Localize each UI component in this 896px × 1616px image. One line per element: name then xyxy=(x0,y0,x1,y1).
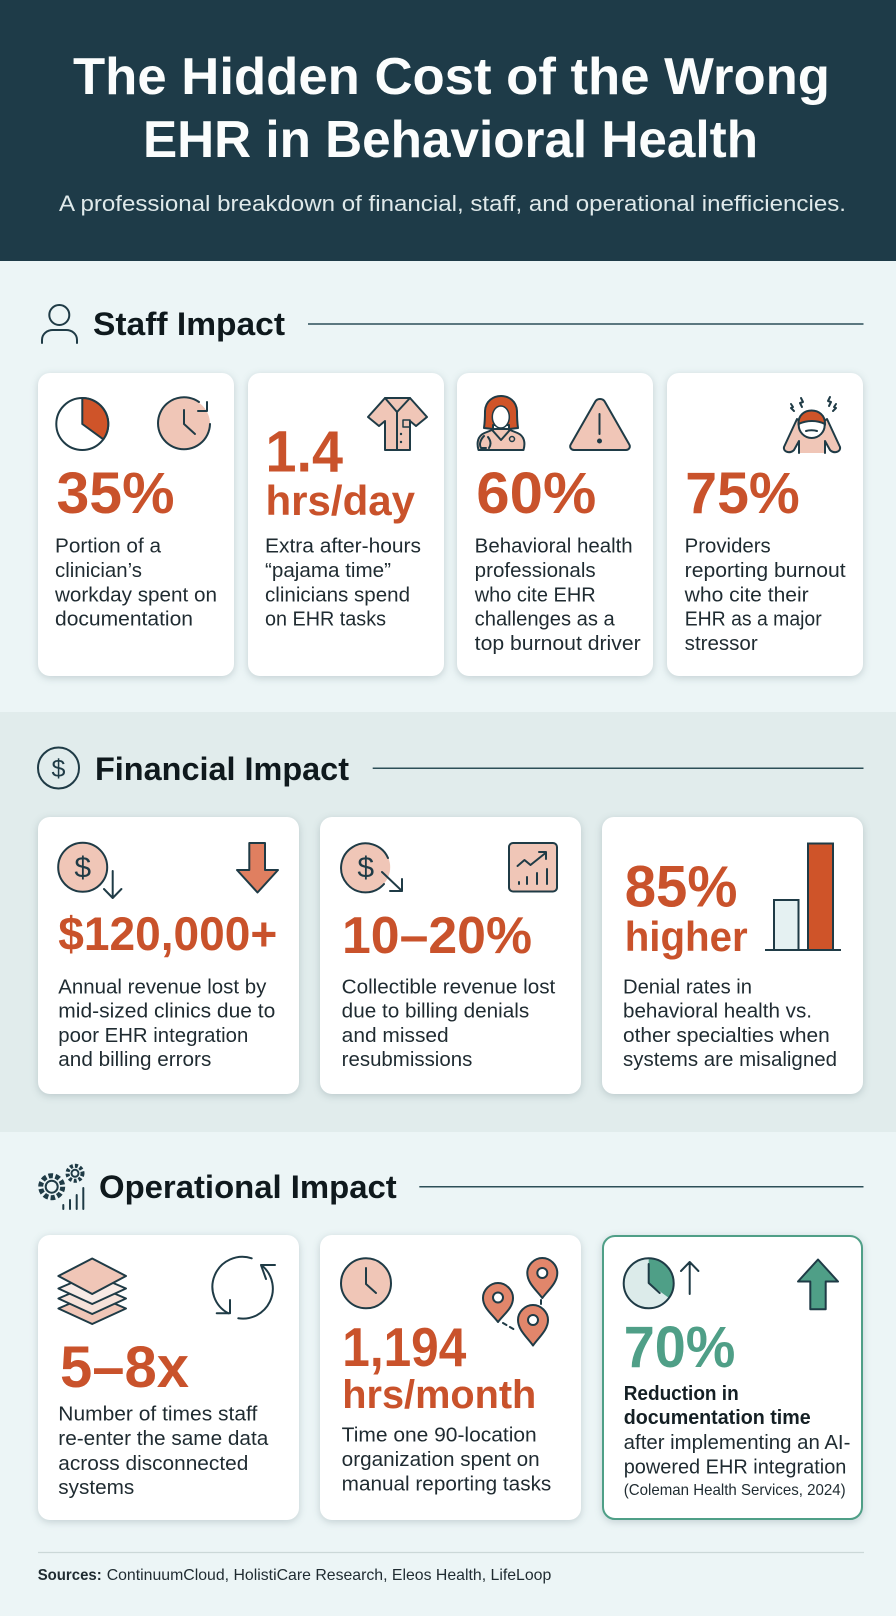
description: re-enter the same data xyxy=(58,1428,269,1450)
description: powered EHR integration xyxy=(624,1456,846,1478)
description: documentation time xyxy=(624,1407,811,1429)
description: and billing errors xyxy=(58,1049,211,1071)
card: 1,194 hrs/month xyxy=(320,1235,581,1520)
description: Providers xyxy=(685,536,771,558)
card: $120,000+ xyxy=(38,817,299,1094)
description: stressor xyxy=(685,633,758,655)
description: behavioral health vs. xyxy=(623,1001,812,1023)
stat: 70% xyxy=(624,1315,735,1380)
icon: person xyxy=(42,305,77,343)
description: Number of times staff xyxy=(58,1404,258,1426)
header banner xyxy=(0,0,896,261)
description: Annual revenue lost by xyxy=(58,976,266,998)
icon: clock with arrow xyxy=(158,397,210,450)
icon: green clock xyxy=(624,1258,698,1308)
description: Denial rates in xyxy=(623,976,752,998)
description: clinician’s xyxy=(55,560,142,582)
icon: dollar with trending arrow xyxy=(341,843,402,892)
stat: 10–20% xyxy=(342,907,532,965)
icon: layers xyxy=(58,1258,126,1324)
description: Extra after-hours xyxy=(265,536,421,558)
section: financial impact xyxy=(38,748,864,1094)
icon: dollar with trending arrow: $ xyxy=(357,852,374,884)
heading: financial impact: Financial Impact xyxy=(95,751,349,787)
description: systems xyxy=(58,1477,134,1499)
sources footer: ContinuumCloud, HolistiCare Research, Eleos Health, LifeLoop xyxy=(107,1567,551,1584)
description: “pajama time” xyxy=(265,560,391,582)
description: who cite EHR xyxy=(474,584,596,606)
stat: hrs/month xyxy=(342,1373,536,1417)
stat: $120,000+ xyxy=(58,907,277,960)
description: Portion of a xyxy=(55,536,162,558)
icon: warning triangle xyxy=(570,399,630,450)
sources footer: Sources: xyxy=(38,1567,102,1584)
icon: doctor xyxy=(478,396,524,450)
icon: clock xyxy=(341,1258,391,1308)
stat: 1.4 xyxy=(266,420,343,485)
stat xyxy=(625,855,748,960)
description xyxy=(54,536,217,631)
description xyxy=(342,976,556,1071)
description: challenges as a xyxy=(475,609,616,631)
description: on EHR tasks xyxy=(265,609,386,631)
heading: staff impact: Staff Impact xyxy=(93,306,285,342)
description: who cite their xyxy=(684,584,809,606)
card: 60% xyxy=(457,373,653,676)
description: EHR as a major xyxy=(685,609,822,631)
stat: 85% xyxy=(625,855,737,920)
section: staff impact xyxy=(38,305,864,676)
description: workday spent on xyxy=(54,584,217,606)
section: operational impact xyxy=(38,1166,864,1520)
card: 5–8x xyxy=(38,1235,299,1520)
title: The Hidden Cost of the Wrong xyxy=(73,48,830,106)
title: EHR in Behavioral Health xyxy=(143,111,758,169)
subtitle: A professional breakdown of financial, staff, and operational inefficiencies. xyxy=(59,191,846,216)
description xyxy=(342,1425,551,1495)
description xyxy=(623,976,837,1071)
icon: big down arrow xyxy=(237,843,278,892)
description: across disconnected xyxy=(58,1453,248,1475)
description xyxy=(684,536,846,655)
description xyxy=(58,1404,269,1499)
description: other specialties when xyxy=(623,1025,830,1047)
stat: 1,194 xyxy=(342,1316,467,1378)
card: 1.4 hrs/day xyxy=(248,373,444,676)
icon: dollar circle: $ xyxy=(52,755,66,783)
card: 10–20% xyxy=(320,817,581,1094)
description: Time one 90-location xyxy=(342,1425,537,1447)
description: Collectible revenue lost xyxy=(342,976,556,998)
description xyxy=(265,536,421,631)
description: resubmissions xyxy=(342,1049,472,1071)
icon: shirt xyxy=(368,398,427,450)
description: systems are misaligned xyxy=(623,1049,837,1071)
stat: 60% xyxy=(476,461,596,526)
description: (Coleman Health Services, 2024) xyxy=(624,1482,846,1499)
icon: pie chart xyxy=(56,398,108,450)
description xyxy=(58,976,275,1071)
card: 70% highlight xyxy=(603,1236,862,1519)
icon: line chart box xyxy=(509,843,557,892)
description: reporting burnout xyxy=(685,560,846,582)
card: 75% xyxy=(667,373,863,676)
stat: higher xyxy=(625,913,748,960)
stat xyxy=(342,1316,536,1417)
stat: 5–8x xyxy=(60,1335,189,1400)
description: documentation xyxy=(55,609,193,631)
icon: stressed person xyxy=(784,397,840,453)
description xyxy=(624,1383,850,1499)
description: organization spent on xyxy=(342,1449,540,1471)
description: poor EHR integration xyxy=(58,1025,248,1047)
description: Behavioral health xyxy=(475,536,633,558)
stat: hrs/day xyxy=(266,477,416,524)
icon: refresh arrows xyxy=(212,1257,275,1319)
description: top burnout driver xyxy=(475,633,641,655)
description: Reduction in xyxy=(624,1383,739,1405)
stat: 35% xyxy=(56,461,174,526)
description: professionals xyxy=(475,560,596,582)
stat xyxy=(266,420,416,524)
description: after implementing an AI- xyxy=(624,1432,850,1454)
icon: location pins xyxy=(483,1258,557,1346)
title xyxy=(73,48,830,169)
stat: 75% xyxy=(685,461,800,526)
card: 35% xyxy=(38,373,234,676)
icon: gears and bars xyxy=(41,1166,83,1209)
bar chart xyxy=(765,844,841,950)
description xyxy=(474,536,641,655)
description: and missed xyxy=(342,1025,449,1047)
icon: dollar circle xyxy=(38,748,79,788)
icon: dollar down xyxy=(58,843,121,898)
description: manual reporting tasks xyxy=(342,1473,551,1495)
description: clinicians spend xyxy=(265,584,410,606)
icon: green up arrow xyxy=(798,1260,838,1309)
description: mid-sized clinics due to xyxy=(58,1001,275,1023)
heading: operational impact: Operational Impact xyxy=(99,1169,397,1205)
icon: dollar down: $ xyxy=(74,852,91,884)
description: due to billing denials xyxy=(342,1001,529,1023)
card: 85% higher xyxy=(602,817,863,1094)
